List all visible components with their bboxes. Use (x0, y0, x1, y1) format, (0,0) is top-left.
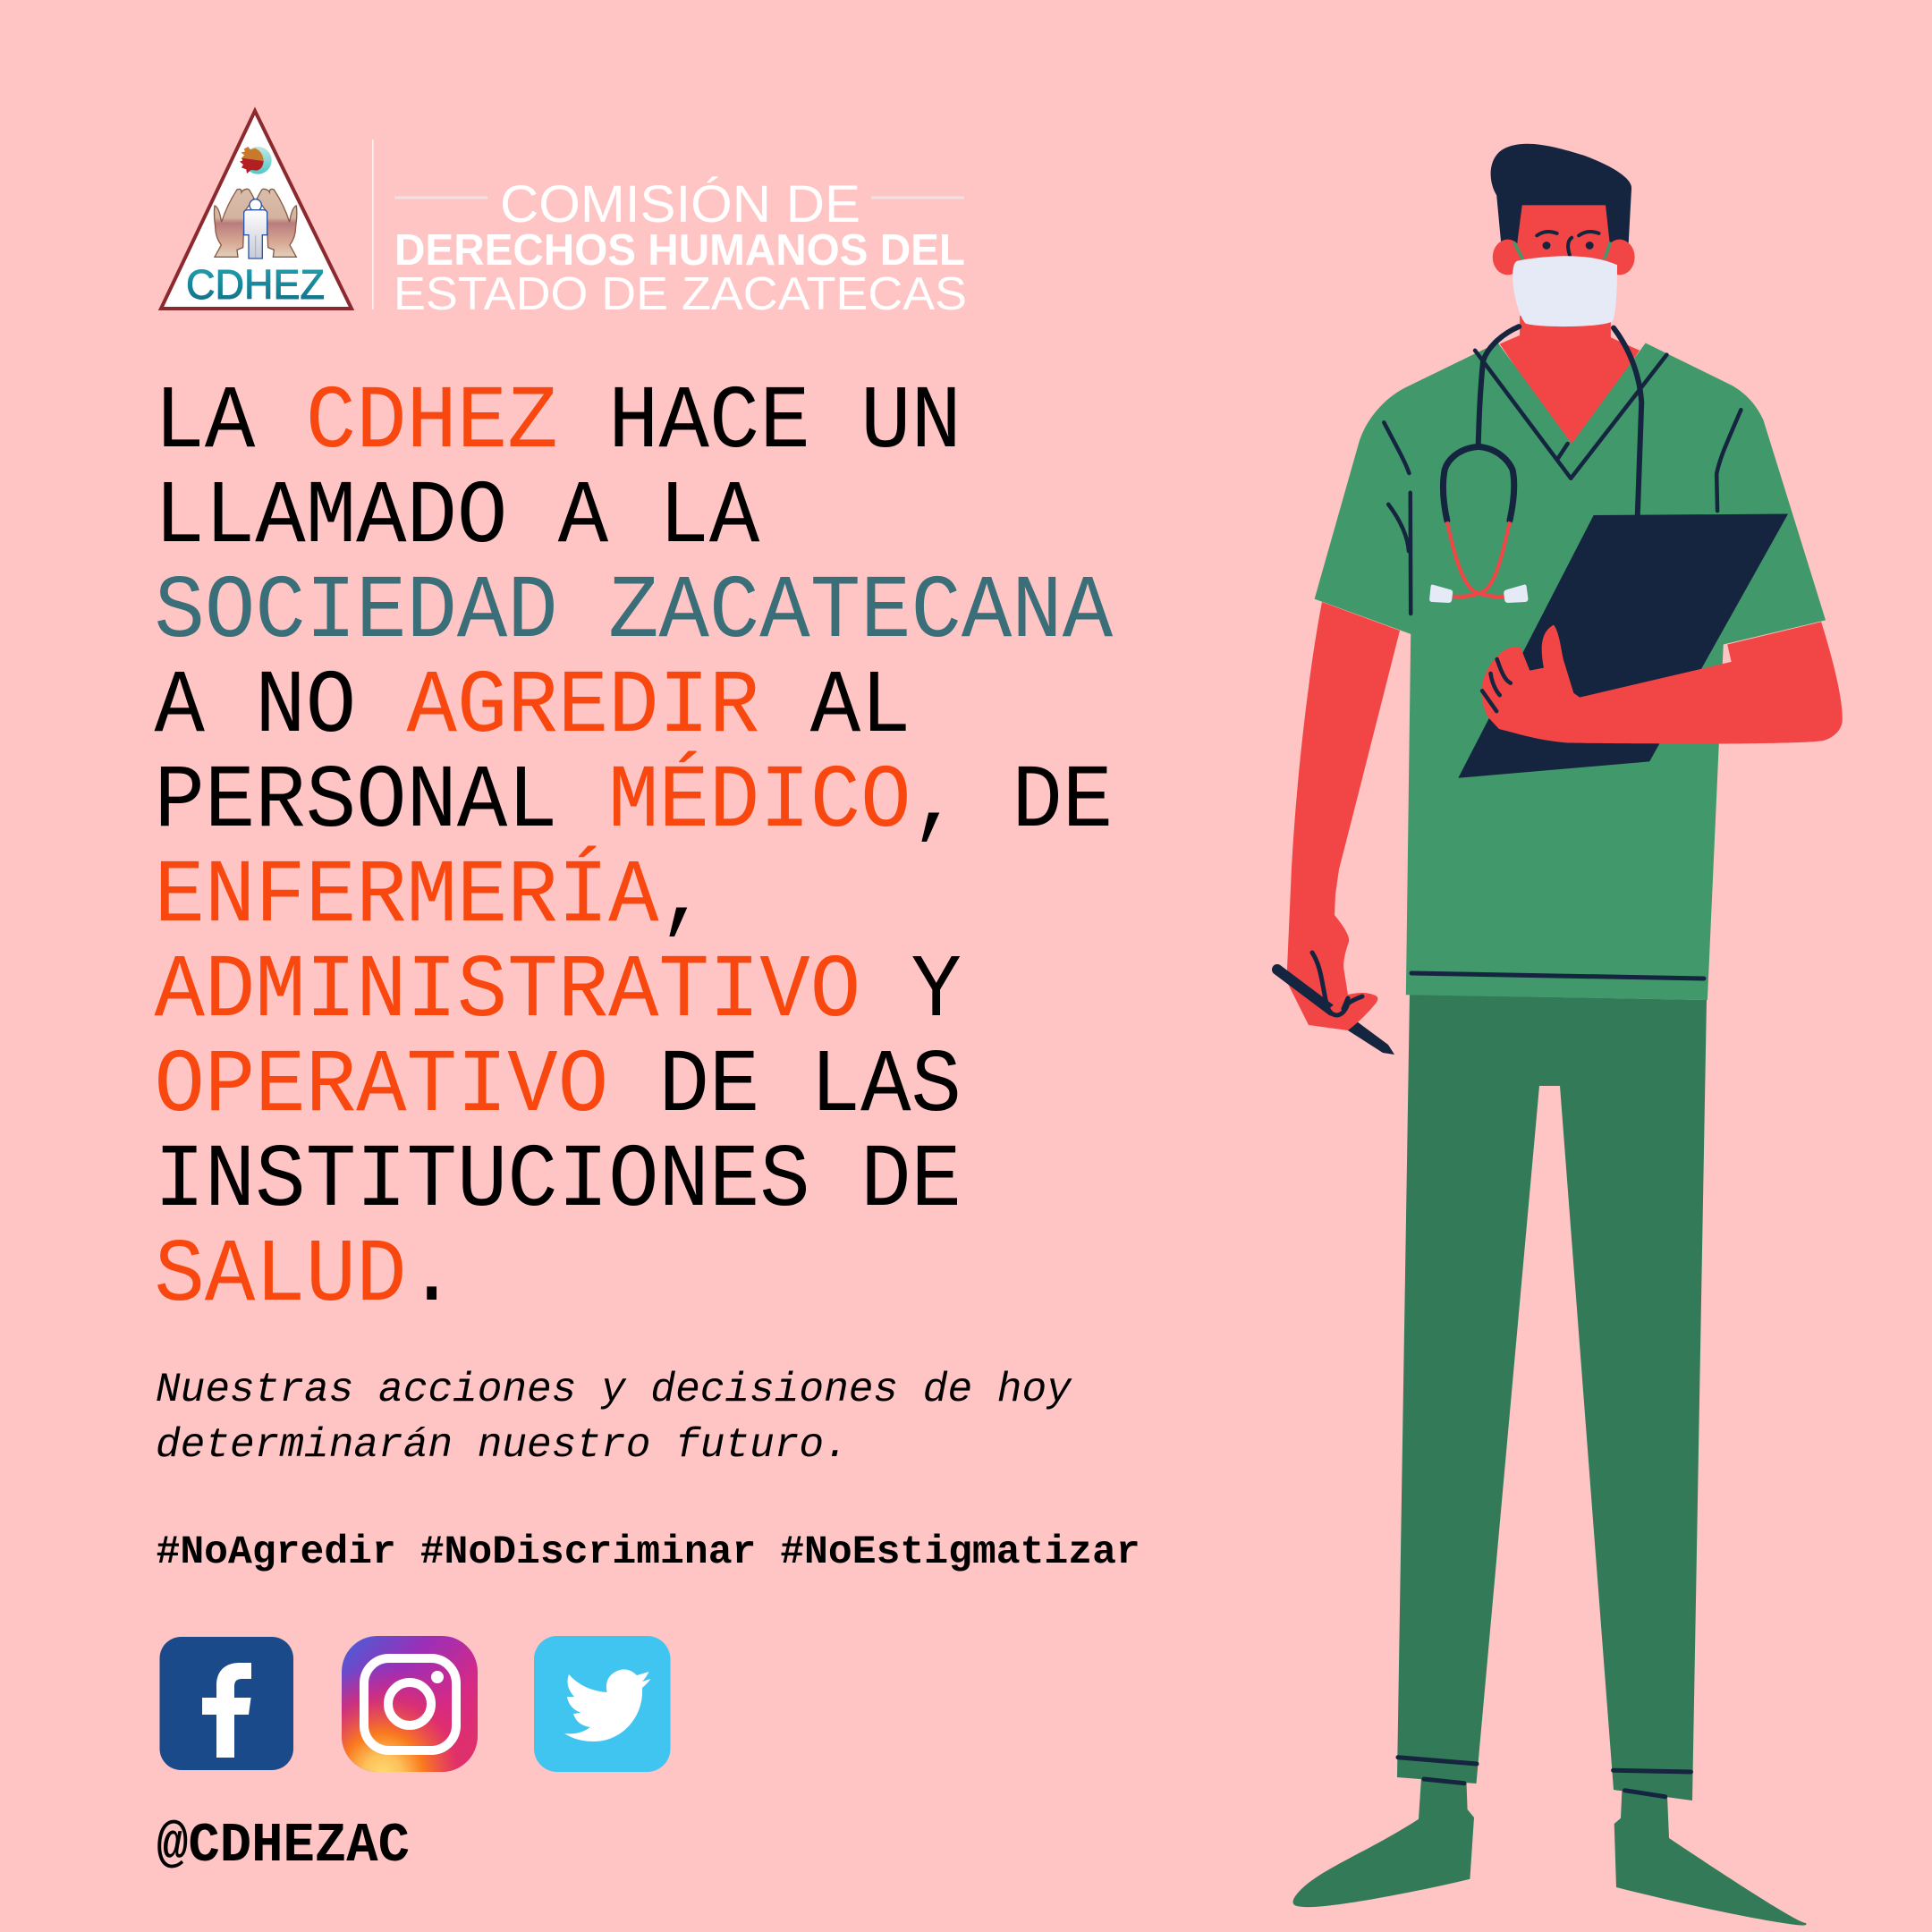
trousers (1397, 995, 1707, 1801)
icon: facebook (159, 1637, 293, 1770)
eyes and brows (1537, 232, 1598, 255)
main heading (154, 373, 1114, 1327)
stethoscope (1429, 326, 1641, 603)
main heading: SOCIEDAD ZACATECANA (154, 563, 1114, 664)
logo wordmark (394, 175, 967, 320)
face mask (1513, 256, 1617, 326)
icon: twitter (534, 1636, 671, 1772)
left arm and hand (1287, 602, 1400, 1030)
main heading: PERSONAL MÉDICO, DE (154, 751, 1113, 853)
collar and sleeve lines (1384, 351, 1741, 614)
main heading: SALUD. (154, 1226, 457, 1327)
logo wordmark: COMISIÓN DE (500, 175, 860, 233)
logo: CDHEZ triangle: CDHEZ (186, 261, 325, 308)
scrubs hem line (1411, 973, 1704, 979)
main heading: LLAMADO A LA (154, 468, 760, 569)
logo divider (372, 140, 374, 309)
hashtags: #NoAgredir #NoDiscriminar #NoEstigmatizar (156, 1530, 1140, 1575)
scrubs top (1315, 343, 1826, 1000)
main heading: ADMINISTRATIVO Y (154, 942, 962, 1043)
ears (1493, 240, 1635, 275)
logo: CDHEZ triangle (161, 111, 352, 309)
italic quote: determinarán nuestro futuro. (156, 1422, 849, 1469)
right shoe (1614, 1791, 1806, 1926)
social handle: @CDHEZAC (157, 1816, 410, 1877)
hair (1491, 144, 1631, 246)
main heading: ENFERMERÍA, (154, 846, 709, 948)
logo wordmark: ESTADO DE ZACATECAS (394, 268, 967, 320)
illustration: doctor (1277, 144, 1843, 1926)
trouser cuff lines (1398, 1758, 1690, 1797)
thumb (1328, 993, 1377, 1030)
hand lines (1312, 953, 1362, 1015)
main heading: A NO AGREDIR AL (154, 657, 911, 758)
neck (1500, 316, 1640, 450)
mask straps (1513, 242, 1610, 259)
icon: instagram (342, 1636, 478, 1772)
finger lines (1482, 659, 1511, 711)
clipboard (1458, 514, 1788, 778)
italic quote (156, 1367, 1072, 1469)
main heading: INSTITUCIONES DE (154, 1131, 962, 1233)
main heading: OPERATIVO DE LAS (154, 1037, 962, 1138)
left shoe (1293, 1778, 1474, 1907)
logo wordmark: DERECHOS HUMANOS DEL (394, 226, 965, 275)
main heading: LA CDHEZ HACE UN (154, 373, 962, 474)
italic quote: Nuestras acciones y decisiones de hoy (156, 1367, 1072, 1413)
upper body (1315, 144, 1843, 1000)
right arm and hand (1481, 622, 1843, 744)
pen (1277, 970, 1394, 1055)
face (1517, 205, 1610, 266)
